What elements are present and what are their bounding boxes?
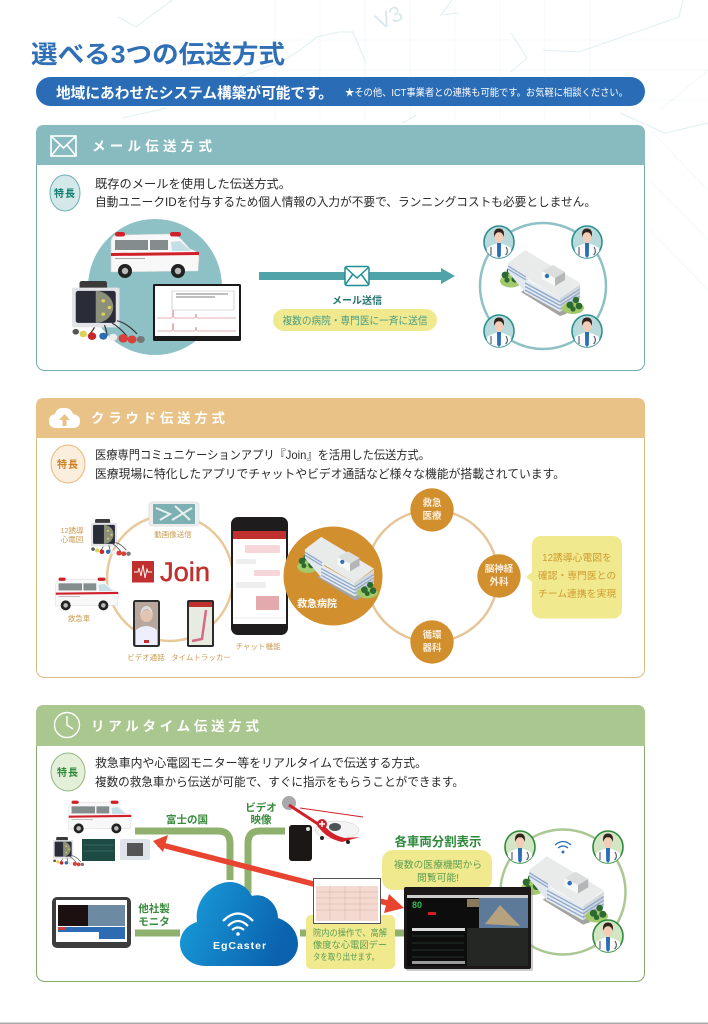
label: Fuji no Kuni: 富士の国 bbox=[166, 813, 208, 826]
illustration: ambulance and devices bbox=[72, 219, 241, 355]
callout: send simultaneously bbox=[273, 309, 437, 331]
cloud: EgCaster bbox=[180, 882, 298, 966]
label: third party monitor: モニタ bbox=[138, 916, 170, 928]
badge: feature: 特長 bbox=[57, 766, 79, 779]
icon: landscape phone video bbox=[149, 502, 199, 526]
feature text: 自動ユニークIDを付与するため個人情報の入力が不要で、ランニングコストも必要としません。 bbox=[95, 194, 596, 209]
callout: high resolution ECG: 像度な心電図デー bbox=[313, 939, 387, 950]
bottom rule bbox=[0, 1022, 708, 1024]
logo: Join: Join bbox=[160, 557, 210, 587]
label: video call: ビデオ通話 bbox=[127, 652, 165, 662]
badge: feature bbox=[51, 753, 85, 791]
label: video stream: 映像 bbox=[250, 813, 272, 826]
callout: multiple facilities: 複数の医療機関から bbox=[394, 858, 482, 871]
icon: wifi bbox=[223, 914, 253, 930]
subtitle banner: 地域にあわせたシステム構築が可能です。 bbox=[56, 84, 333, 102]
feature text bbox=[95, 176, 596, 209]
icon: video call phone bbox=[133, 600, 160, 647]
callout: send simultaneously: 複数の病院・専門医に一斉に送信 bbox=[282, 314, 428, 327]
icon: envelope bbox=[51, 136, 76, 156]
feature text: 医療専門コミュニケーションアプリ『Join』を活用した伝送方式。 bbox=[95, 447, 430, 462]
emergency hospital: 救急病院 bbox=[297, 597, 337, 610]
callout: high resolution ECG bbox=[306, 915, 395, 969]
badge: feature bbox=[51, 445, 85, 483]
subtitle banner bbox=[36, 77, 645, 106]
callout: multiple facilities bbox=[382, 850, 492, 890]
panel header: mail: メール伝送方式 bbox=[92, 138, 212, 154]
feature text bbox=[95, 755, 464, 789]
feature text bbox=[95, 447, 565, 481]
badge: feature: 特長 bbox=[57, 458, 79, 471]
label: third party monitor: 他社製 bbox=[138, 902, 170, 915]
device: 12 lead ECG bbox=[91, 519, 131, 556]
diagram: hospital and doctors bbox=[480, 223, 606, 349]
node: neurosurgery bbox=[477, 554, 521, 598]
callout: team collaboration: 12誘導心電図を bbox=[542, 551, 612, 564]
ambulance bbox=[69, 801, 131, 833]
feature text: 救急車内や心電図モニター等をリアルタイムで伝送する方式。 bbox=[95, 755, 427, 770]
panel header: realtime: リアルタイム伝送方式 bbox=[91, 718, 260, 734]
cloud: EgCaster: EgCaster bbox=[213, 940, 267, 952]
ECG printout bbox=[314, 878, 380, 924]
icon: clock bbox=[54, 712, 80, 738]
feature text: 既存のメールを使用した伝送方式。 bbox=[95, 176, 291, 191]
panel header: cloud: クラウド伝送方式 bbox=[91, 410, 226, 426]
panel header: cloud bbox=[36, 398, 645, 438]
node: neurosurgery: 脳神経 bbox=[485, 563, 514, 575]
callout: high resolution ECG: タを取り出せます。 bbox=[313, 951, 379, 962]
background: ECG paper pattern bbox=[118, 0, 708, 290]
panel: realtime transmission bbox=[36, 705, 645, 982]
arrow: mail send bbox=[259, 266, 455, 286]
node: neurosurgery: 外科 bbox=[489, 576, 509, 588]
panel: cloud transmission bbox=[36, 398, 645, 678]
panel: mail transmission bbox=[36, 125, 645, 370]
helicopter bbox=[282, 796, 363, 844]
device: video transmitter bbox=[289, 825, 312, 861]
icon: time tracker phone bbox=[187, 600, 214, 647]
feature text: 医療現場に特化したアプリでチャットやビデオ通話など様々な機能が搭載されています。 bbox=[95, 466, 565, 481]
title: 選べる3つの伝送方式 bbox=[31, 41, 285, 69]
panel header: mail bbox=[36, 125, 645, 165]
label: ambulance: 救急車 bbox=[68, 613, 91, 623]
diagram: hospital and doctors bbox=[500, 830, 626, 954]
node: emergency medicine bbox=[410, 488, 454, 532]
label: 12 lead ECG: 心電図 bbox=[61, 534, 83, 544]
devices: monitors in ambulance bbox=[53, 837, 150, 866]
node: emergency medicine: 救急 bbox=[422, 497, 442, 509]
tablet: other monitor bbox=[52, 897, 131, 948]
label: time tracker: タイムトラッカー bbox=[171, 653, 231, 662]
label: chat feature: チャット機能 bbox=[236, 641, 281, 651]
icon: wifi bbox=[555, 842, 571, 853]
ambulance bbox=[56, 578, 118, 610]
callout: high resolution ECG: 院内の操作で、高解 bbox=[313, 927, 387, 938]
node: cardiology: 器科 bbox=[422, 642, 442, 654]
background: ECG paper pattern: V3 bbox=[372, 0, 407, 35]
icon: cloud upload bbox=[49, 408, 80, 428]
callout: team collaboration: チーム連携を実現 bbox=[538, 587, 616, 600]
badge: feature: 特長 bbox=[54, 187, 76, 200]
ring: departments bbox=[366, 510, 498, 642]
diagram: Join ring bbox=[56, 502, 233, 662]
label: 12 lead ECG: 12誘導 bbox=[60, 525, 84, 535]
connector lines bbox=[135, 831, 405, 933]
node: cardiology: 循環 bbox=[422, 629, 442, 641]
feature text: 複数の救急車から伝送が可能で、すぐに指示をもらうことができます。 bbox=[95, 774, 464, 789]
label: video image: 動画像送信 bbox=[154, 529, 192, 539]
label: mail send: メール送信 bbox=[332, 294, 382, 307]
tablet: split screen monitor: 80 bbox=[412, 900, 422, 910]
node: cardiology bbox=[410, 620, 454, 664]
logo: Join bbox=[132, 557, 210, 587]
label: 12 lead ECG bbox=[60, 525, 84, 544]
subtitle banner: ★その他、ICT事業者との連携も可能です。お気軽に相談ください。 bbox=[345, 86, 628, 99]
label: third party monitor bbox=[138, 902, 170, 928]
emergency hospital bbox=[284, 526, 382, 626]
callout: multiple facilities: 閲覧可能! bbox=[417, 871, 459, 884]
label: video stream: ビデオ bbox=[245, 801, 277, 814]
tablet: split screen monitor bbox=[404, 887, 533, 971]
panel header: realtime bbox=[36, 705, 645, 746]
label: video stream bbox=[245, 801, 277, 826]
red arrows bbox=[153, 835, 404, 913]
node: emergency medicine: 医療 bbox=[422, 510, 442, 522]
phone: chat screen bbox=[231, 517, 288, 635]
badge: feature bbox=[50, 175, 80, 211]
callout: team collaboration: 確認・専門医との bbox=[538, 569, 616, 582]
heading: split display: 各車両分割表示 bbox=[394, 834, 482, 849]
callout: team collaboration bbox=[526, 536, 622, 618]
